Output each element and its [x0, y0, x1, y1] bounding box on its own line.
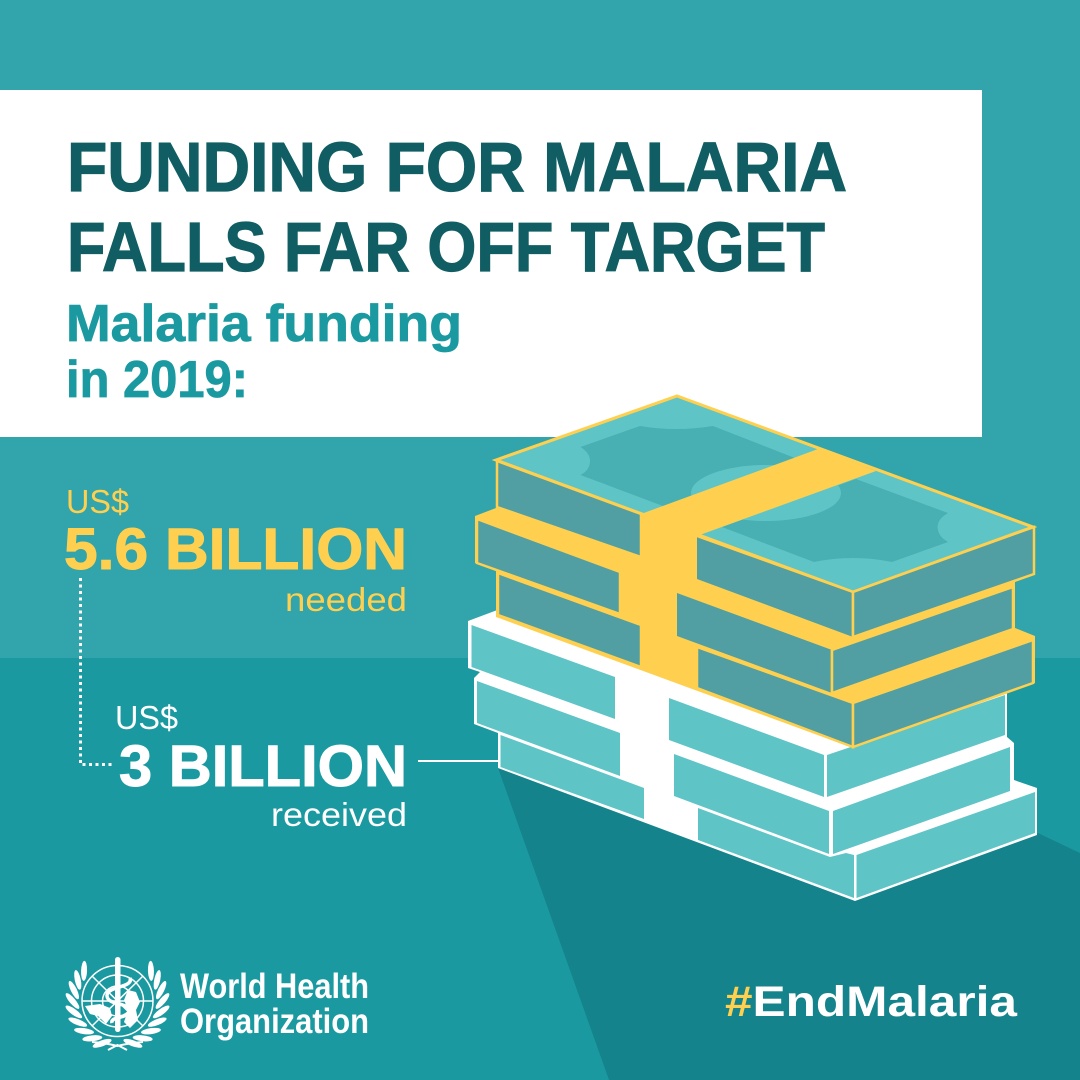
needed amount: needed — [285, 581, 407, 618]
title: FUNDING FOR MALARIA — [67, 128, 847, 206]
yellow money stack: needed — [475, 395, 1035, 748]
title: FALLS FAR OFF TARGET — [67, 208, 825, 286]
subtitle: in 2019: — [66, 351, 248, 409]
stack shadow — [498, 768, 1080, 1080]
WHO emblem — [64, 957, 171, 1050]
laurel ribbon — [92, 1042, 143, 1050]
globe — [82, 966, 153, 1036]
subtitle: Malaria funding — [66, 295, 462, 353]
laurel left — [64, 961, 113, 1050]
needed amount: 5.6 BILLION — [64, 517, 407, 582]
received amount: 3 BILLION — [119, 734, 407, 799]
title — [67, 128, 847, 286]
paper band — [641, 449, 876, 688]
continents — [85, 1004, 112, 1024]
dotted connector — [80, 578, 114, 764]
banknote sides — [477, 461, 1034, 747]
leader line — [418, 760, 498, 762]
received amount — [115, 699, 407, 833]
received amount: received — [271, 796, 407, 833]
white money stack: received — [468, 609, 1037, 901]
laurel right — [122, 961, 171, 1050]
received amount: US$ — [115, 699, 178, 736]
WHO wordmark: World Health — [180, 967, 369, 1006]
subtitle — [66, 295, 462, 409]
needed amount: US$ — [66, 483, 129, 520]
staff — [115, 957, 120, 1032]
WHO wordmark: Organization — [180, 1002, 369, 1041]
WHO wordmark — [180, 967, 369, 1041]
title panel — [0, 90, 982, 437]
banknote top — [496, 396, 1033, 592]
serpent — [107, 978, 130, 1023]
hashtag: #EndMalaria — [725, 978, 1018, 1026]
needed amount — [64, 483, 407, 618]
